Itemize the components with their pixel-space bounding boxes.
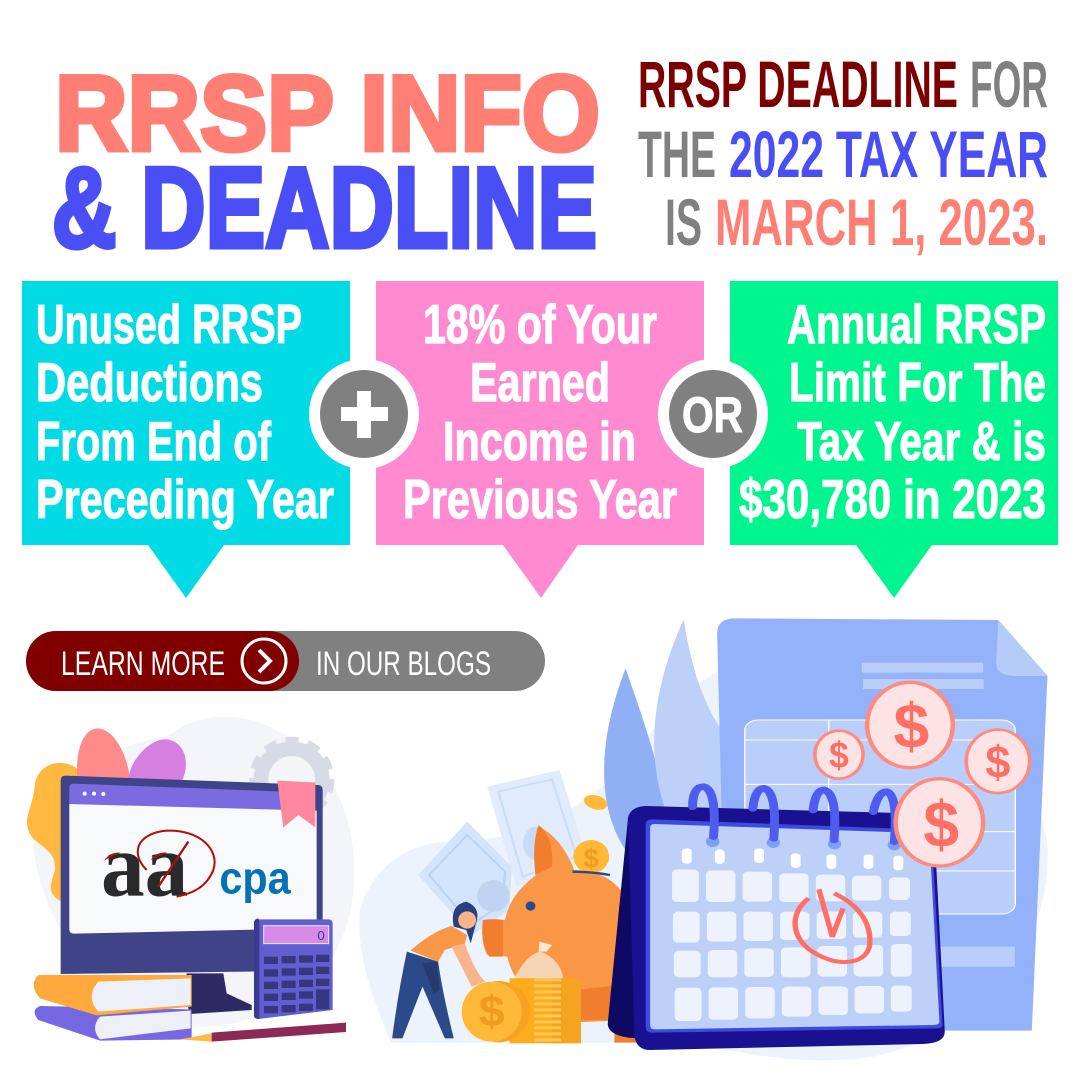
panel: earned income: Previous Year bbox=[403, 468, 677, 530]
icon: piggy bank bbox=[482, 792, 637, 1043]
illustration: computer and logo bbox=[27, 717, 354, 1042]
icon: piggy bank: $ bbox=[584, 843, 599, 873]
title bbox=[52, 53, 600, 272]
panel: annual limit bbox=[730, 281, 1058, 598]
title: RRSP INFO bbox=[55, 53, 600, 173]
icon: dollar coins bbox=[815, 682, 1030, 866]
panel: unused deductions: Unused RRSP bbox=[36, 293, 302, 355]
button: learn more: LEARN MORE bbox=[61, 645, 225, 683]
icon: coins and money bag: $ bbox=[479, 988, 505, 1036]
panel: earned income: Income in bbox=[443, 410, 636, 472]
illustration: computer and logo: 0 bbox=[317, 928, 325, 943]
icon: or bbox=[658, 359, 768, 469]
logo: aa cpa: aa bbox=[101, 816, 188, 915]
panel: earned income bbox=[376, 281, 704, 598]
icon: dollar coins: $ bbox=[985, 738, 1010, 788]
icon: dollar coins: $ bbox=[829, 736, 849, 776]
icon: calendar bbox=[608, 787, 945, 1050]
deadline statement bbox=[638, 47, 1048, 259]
deadline statement: IS bbox=[665, 185, 702, 259]
icon: plus bbox=[309, 359, 419, 469]
logo: aa cpa bbox=[101, 816, 292, 915]
button: learn more bbox=[26, 631, 545, 691]
logo: aa cpa: cpa bbox=[219, 852, 292, 903]
illustration: finance scene bbox=[359, 618, 1048, 1060]
deadline statement: THE bbox=[638, 117, 716, 191]
panel: earned income: Earned bbox=[470, 351, 610, 413]
panel: unused deductions bbox=[22, 281, 350, 598]
panel: unused deductions: Preceding Year bbox=[36, 468, 334, 530]
icon: coins and money bag bbox=[462, 942, 581, 1043]
icon: woman bbox=[392, 902, 485, 1038]
icon: checkmark circle bbox=[795, 889, 870, 962]
panel: unused deductions: From End of bbox=[36, 410, 271, 472]
title: & DEADLINE bbox=[52, 145, 597, 272]
icon: dollar coins: $ bbox=[923, 788, 959, 861]
button: learn more: IN OUR BLOGS bbox=[316, 645, 491, 683]
icon: or: OR bbox=[682, 387, 743, 443]
panel: unused deductions: Deductions bbox=[36, 351, 263, 413]
panel: earned income: 18% of Your bbox=[423, 293, 657, 355]
icon: dollar coins: $ bbox=[893, 690, 929, 762]
